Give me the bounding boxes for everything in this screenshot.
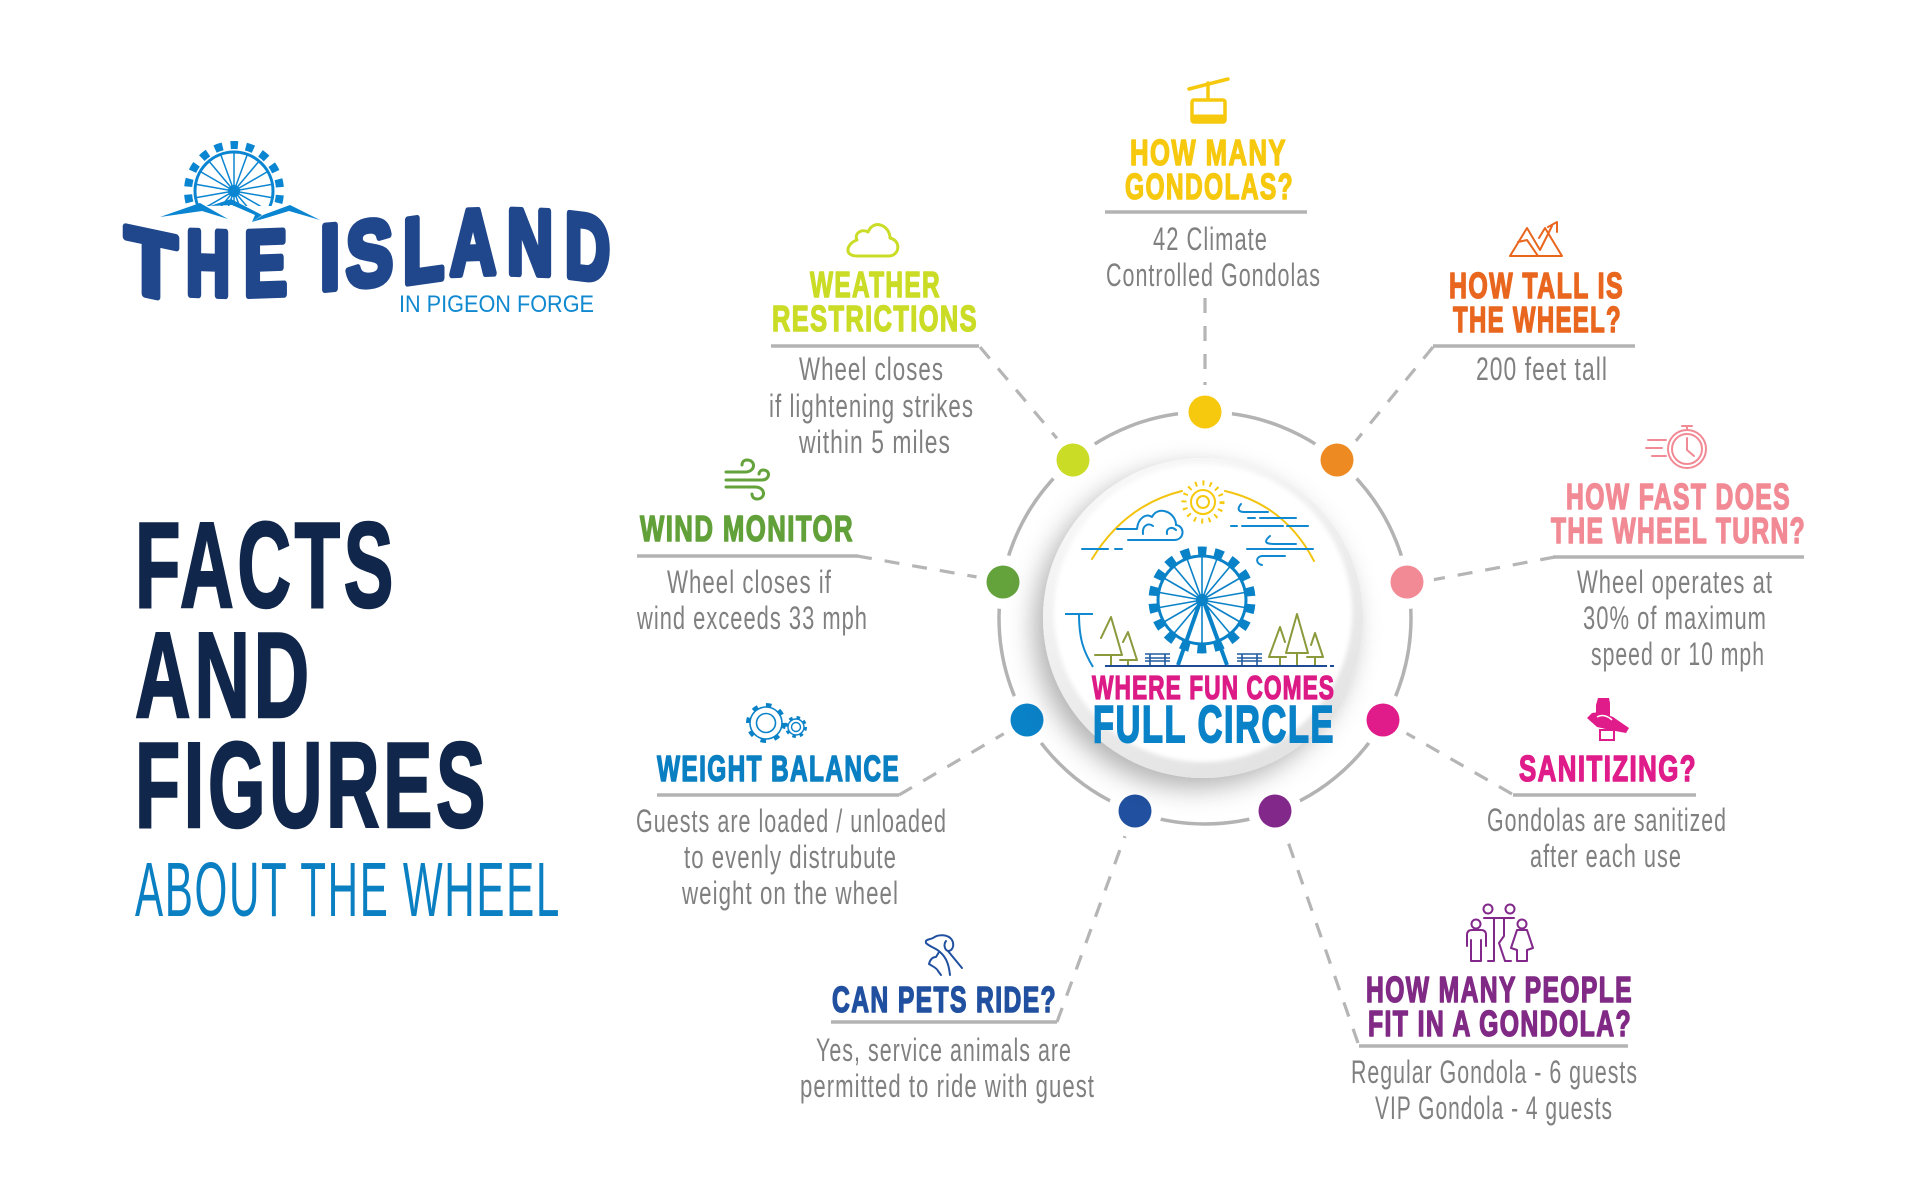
- center badge: Where fun comes full circle: [1043, 458, 1363, 778]
- tagline: [1092, 669, 1335, 754]
- tagline: WHERE FUN COMES: [1092, 669, 1335, 706]
- illustration: trees: [1095, 614, 1323, 665]
- illustration: sky: [1082, 483, 1314, 565]
- panel: weight balance: [636, 705, 947, 911]
- heading: HOW MANY PEOPLE: [1366, 969, 1633, 1010]
- illustration: cable stand: [1065, 614, 1093, 667]
- wordmark: The Island: [125, 190, 610, 321]
- heading: [1125, 132, 1294, 207]
- heading: WEATHER: [810, 264, 941, 305]
- panel: how fast does the wheel turn: [1551, 426, 1806, 672]
- body text: VIP Gondola - 4 guests: [1375, 1090, 1613, 1126]
- heading: THE WHEEL TURN?: [1551, 510, 1806, 551]
- body text: Yes, service animals are: [816, 1032, 1072, 1068]
- heading: [1366, 969, 1633, 1044]
- heading: HOW FAST DOES: [1566, 476, 1791, 517]
- panel: how tall is the wheel: [1433, 222, 1635, 387]
- body text: Regular Gondola - 6 guests: [1351, 1054, 1638, 1090]
- heading lines: FIGURES: [135, 717, 489, 853]
- body text: [800, 1032, 1095, 1104]
- wordmark: The Island: L: [403, 194, 444, 304]
- heading: [1449, 265, 1624, 340]
- body text: wind exceeds 33 mph: [636, 600, 868, 636]
- heading: GONDOLAS?: [1125, 166, 1294, 207]
- heading: HOW TALL IS: [1449, 265, 1624, 306]
- body text: permitted to ride with guest: [800, 1068, 1095, 1104]
- heading: WEIGHT BALANCE: [657, 748, 900, 789]
- heading: SANITIZING?: [1519, 748, 1697, 789]
- icon: gondola: [1189, 79, 1228, 122]
- body text: [636, 564, 868, 636]
- body text: 42 Climate: [1153, 221, 1268, 257]
- logo: The Island in Pigeon Forge: [125, 145, 610, 321]
- logo subtitle: IN PIGEON FORGE: [399, 291, 594, 318]
- heading: [772, 264, 978, 339]
- connector ring: [999, 412, 1411, 824]
- panel: how many people fit in a gondola: [1351, 904, 1638, 1126]
- icon: gears: [748, 705, 806, 741]
- title: Facts and Figures about the wheel: [135, 497, 561, 933]
- heading: THE WHEEL?: [1453, 299, 1622, 340]
- body text: [636, 803, 947, 911]
- body text: Guests are loaded / unloaded: [636, 803, 947, 839]
- icon: cloud: [848, 225, 898, 256]
- wordmark: The Island: E: [244, 211, 287, 316]
- heading: WIND MONITOR: [640, 508, 854, 549]
- wordmark: The Island: A: [450, 190, 496, 295]
- heading: HOW MANY: [1130, 132, 1287, 173]
- heading lines: [135, 497, 489, 853]
- subheading: ABOUT THE WHEEL: [135, 847, 561, 933]
- illustration: benches and ground: [1105, 654, 1334, 666]
- panel: can pets ride: [800, 935, 1095, 1104]
- tagline: FULL CIRCLE: [1093, 696, 1335, 754]
- wordmark: The Island: D: [565, 192, 610, 302]
- panel: sanitizing: [1487, 698, 1727, 874]
- wordmark: The Island: N: [507, 190, 553, 295]
- body text: if lightening strikes: [769, 388, 974, 424]
- panel: how many gondolas: [1105, 79, 1321, 293]
- body text: [1351, 1054, 1638, 1126]
- body text: Wheel closes if: [667, 564, 832, 600]
- illustration: ferris wheel: [1153, 551, 1251, 665]
- panel: wind monitor: [636, 460, 868, 636]
- wordmark: The Island: I: [320, 205, 340, 310]
- body text: to evenly distrubute: [684, 839, 897, 875]
- wordmark: The Island: T: [125, 207, 177, 321]
- body text: 30% of maximum: [1583, 600, 1767, 636]
- wordmark: The Island: H: [186, 211, 230, 316]
- body text: [1487, 802, 1727, 874]
- wordmark: The Island: S: [346, 199, 393, 307]
- icon: mountain chart: [1510, 222, 1562, 256]
- icon: logo ferris wheel: [184, 141, 284, 206]
- body text: after each use: [1530, 838, 1682, 874]
- icon: wind: [726, 460, 769, 499]
- heading: FIT IN A GONDOLA?: [1368, 1003, 1632, 1044]
- body text: [1106, 221, 1321, 293]
- body text: within 5 miles: [798, 424, 951, 460]
- body text: Controlled Gondolas: [1106, 257, 1321, 293]
- heading: CAN PETS RIDE?: [832, 979, 1057, 1020]
- body text: weight on the wheel: [681, 875, 899, 911]
- body text: speed or 10 mph: [1591, 636, 1765, 672]
- icon: logo mountains: [160, 199, 320, 222]
- heading: RESTRICTIONS: [772, 298, 978, 339]
- body text: 200 feet tall: [1476, 351, 1608, 387]
- icon: dog and cat: [926, 935, 962, 975]
- body text: Wheel operates at: [1577, 564, 1773, 600]
- body text: [1577, 564, 1773, 672]
- icon: speed clock: [1646, 426, 1706, 468]
- heading: [1551, 476, 1806, 551]
- body text: Gondolas are sanitized: [1487, 802, 1727, 838]
- body text: Wheel closes: [799, 351, 944, 387]
- icon: sanitizing hand: [1587, 698, 1629, 740]
- icon: family: [1467, 904, 1533, 961]
- ring dots: [976, 385, 1434, 838]
- badge disc: [1043, 458, 1363, 778]
- panel: weather restrictions: [769, 225, 979, 460]
- body text: [769, 351, 974, 460]
- heading lines: FACTS: [135, 497, 397, 633]
- dashed connectors: [857, 298, 1555, 1043]
- heading lines: AND: [135, 607, 313, 743]
